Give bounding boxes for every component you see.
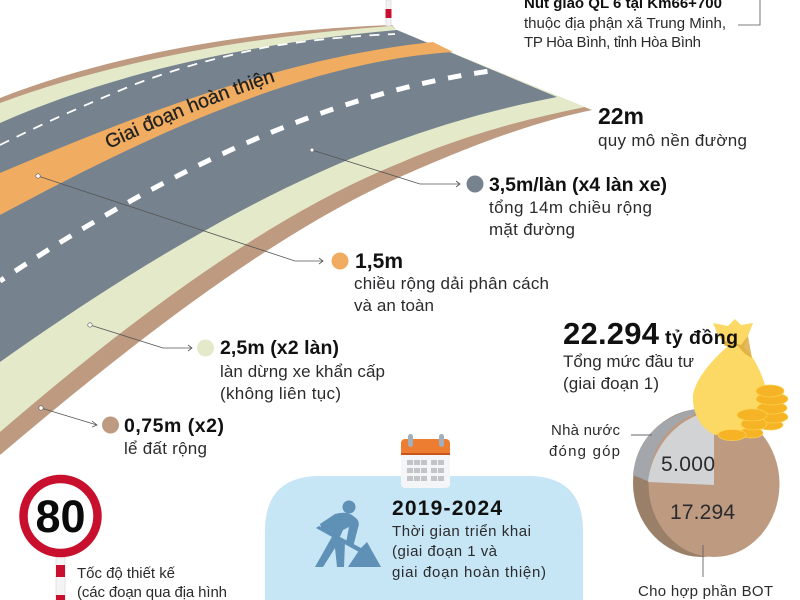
median label: [109, 75, 295, 149]
signpost top: [386, 0, 392, 26]
callout: median width: và an toàn: [354, 296, 434, 315]
panel: timeline: [265, 434, 583, 600]
design speed note: [77, 565, 227, 600]
thin lane dashes: [0, 34, 395, 145]
pie chart: investment: 17.294: [670, 501, 735, 524]
callout: emergency lane: 2,5m (x2 làn): [220, 337, 339, 359]
icon: worker: [315, 500, 381, 567]
callout: shoulder: lể đất rộng: [124, 439, 207, 458]
callout: lane width: mặt đường: [489, 220, 575, 239]
design speed note: Tốc độ thiết kế: [77, 565, 176, 582]
callout: median width: chiều rộng dải phân cách: [354, 274, 549, 293]
road width 22m: 22m: [598, 103, 644, 129]
investment heading: 22.294: [563, 316, 660, 351]
icon: calendar: [401, 434, 450, 488]
pie labels: Nhà nước: [551, 422, 620, 439]
investment heading: tỷ đồng: [665, 327, 738, 349]
interchange note: [524, 0, 760, 51]
investment heading: Tổng mức đầu tư: [563, 352, 694, 371]
pie chart: investment: [631, 408, 780, 577]
callout: lane width: [310, 148, 667, 239]
road width 22m: [598, 103, 747, 150]
thick lane dashes: [0, 71, 490, 281]
panel: timeline: 2019-2024: [392, 497, 502, 520]
panel: timeline: (giai đoạn 1 và: [392, 543, 498, 560]
panel: timeline: giai đoạn hoàn thiện): [392, 564, 546, 581]
pie chart: investment: 5.000: [661, 453, 715, 476]
callout: shoulder: [39, 406, 224, 458]
road cross-section: Giai đoạn hoàn thiện: [106, 72, 275, 147]
pie labels: [549, 422, 773, 600]
callout: emergency lane: (không liên tục): [220, 384, 341, 403]
speed sign: [24, 479, 98, 600]
pie labels: Cho hợp phần BOT: [638, 583, 773, 600]
emergency lane: [0, 26, 585, 432]
callout: shoulder: 0,75m (x2): [124, 415, 224, 437]
callout: median width: 1,5m: [355, 250, 403, 273]
interchange note: TP Hòa Bình, tỉnh Hòa Bình: [524, 34, 701, 51]
interchange note: thuộc địa phận xã Trung Minh,: [524, 15, 726, 32]
callout: emergency lane: [88, 323, 385, 403]
asphalt lanes: [0, 30, 557, 362]
pie labels: đóng góp: [549, 443, 620, 460]
callout: emergency lane: làn dừng xe khẩn cấp: [220, 362, 385, 381]
callout: lane width: tổng 14m chiều rộng: [489, 198, 652, 217]
road cross-section: [0, 25, 592, 455]
investment heading: [563, 316, 738, 393]
callout: lane width: 3,5m/làn (x4 làn xe): [489, 174, 667, 196]
panel: timeline: Thời gian triển khai: [392, 523, 531, 540]
icon: money bag: [693, 319, 788, 440]
callout: median width: [36, 174, 549, 315]
road shoulder: [0, 25, 592, 455]
speed sign: 80: [35, 491, 86, 542]
median strip: [0, 42, 453, 215]
road width 22m: quy mô nền đường: [598, 131, 747, 150]
investment heading: (giai đoạn 1): [563, 374, 659, 393]
